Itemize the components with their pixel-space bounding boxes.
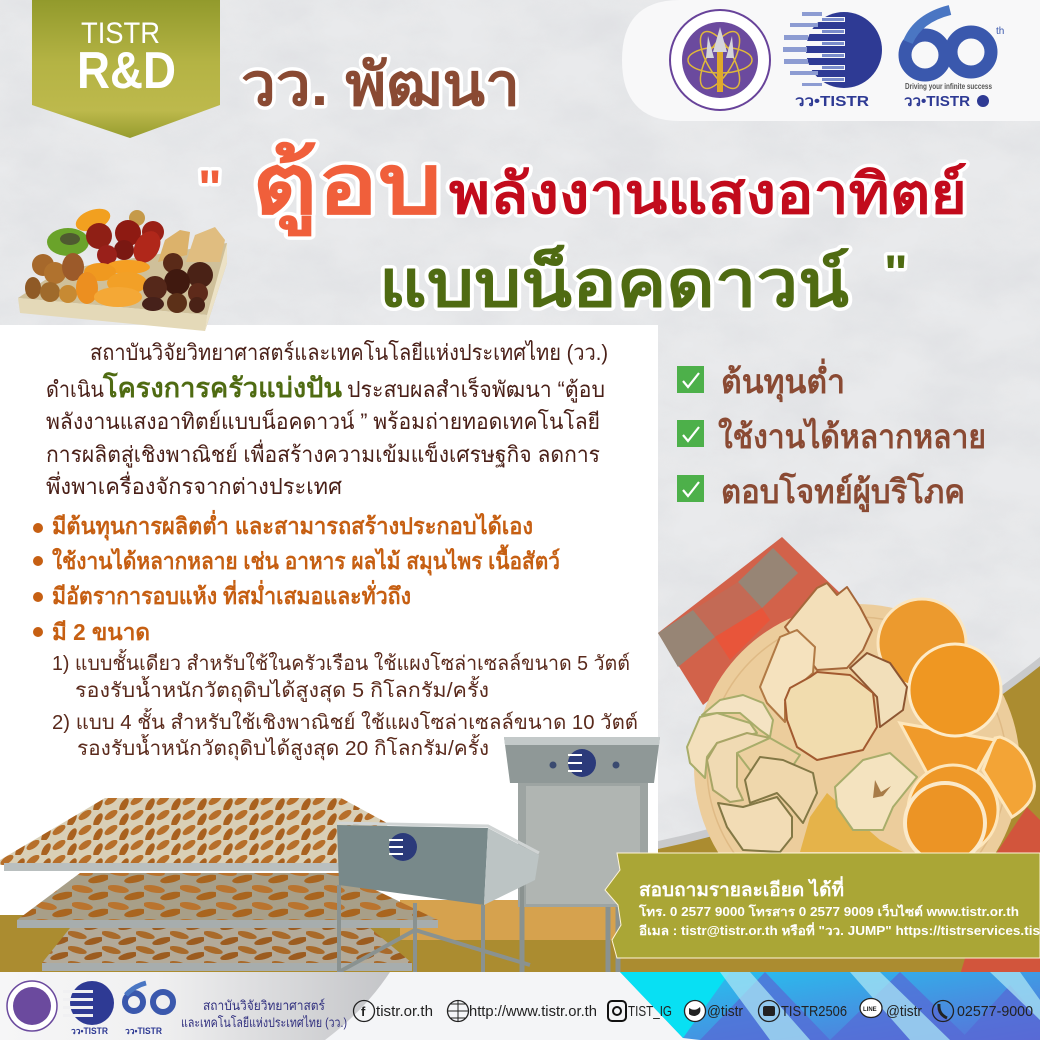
checklist: ต้นทุนต่ำ bbox=[721, 358, 845, 403]
bullet list: มีต้นทุนการผลิตต่ำ และสามารถสร้างประกอบได้เอง bbox=[52, 509, 533, 541]
title: " bbox=[884, 245, 908, 301]
text block: intro: ดำเนิน bbox=[46, 377, 104, 402]
ribbon: TISTR R&D: R&D bbox=[77, 42, 176, 100]
tan floor strip bbox=[400, 900, 630, 940]
footer bbox=[0, 972, 1040, 1040]
ribbon: TISTR R&D: TISTR bbox=[81, 17, 160, 50]
footer logos: วว•TISTR bbox=[71, 1026, 108, 1036]
text block: intro: การผลิตสู่เชิงพาณิชย์ เพื่อสร้างความเข้มแข็งเศรษฐกิจ ลดการ bbox=[46, 439, 600, 468]
size details: รองรับน้ำหนักวัตถุดิบได้สูงสุด 5 กิโลกรัม/ครั้ง bbox=[75, 676, 489, 703]
title: วว. พัฒนา bbox=[241, 52, 520, 118]
checklist: ตอบโจทย์ผู้บริโภค bbox=[721, 472, 965, 513]
logo: TISTR sphere: วว•TISTR bbox=[795, 93, 869, 110]
checklist bbox=[677, 358, 986, 513]
image: dryer cabinet bbox=[504, 737, 660, 972]
footer social links: f bbox=[361, 1004, 366, 1019]
text block: intro: โครงการครัวแบ่งปัน bbox=[102, 371, 343, 403]
bullet list: ใช้งานได้หลากหลาย เช่น อาหาร ผลไม้ สมุนไพร เนื้อสัตว์ bbox=[52, 544, 560, 576]
title bbox=[198, 52, 967, 320]
apple slices bbox=[785, 583, 872, 670]
text block: intro: พลังงานแสงอาทิตย์แบบน็อคดาวน์ ” พร้อมถ่ายทอดเทคโนโลยี bbox=[46, 407, 600, 434]
checklist: ใช้งานได้หลากหลาย bbox=[718, 417, 986, 455]
logo: 60th anniversary: th bbox=[996, 26, 1004, 37]
logo: 60th anniversary bbox=[904, 10, 1004, 110]
footer social links: @tistr bbox=[886, 1003, 922, 1020]
image: drying racks bbox=[0, 798, 438, 971]
image: small dryer bbox=[337, 823, 539, 972]
logo: 60th anniversary: Driving your infinite success bbox=[905, 81, 992, 91]
footer organisation name bbox=[181, 998, 347, 1030]
logo: 60th anniversary: วว•TISTR bbox=[904, 93, 970, 110]
image: dried fruit tray bbox=[18, 204, 227, 331]
footer social links: LINE bbox=[863, 1007, 877, 1013]
panel: description background bbox=[0, 325, 658, 915]
image: dried fruit plate bbox=[658, 537, 1040, 975]
footer logos bbox=[7, 981, 173, 1036]
gold lower band bbox=[0, 657, 1040, 975]
logo: TISTR sphere bbox=[783, 12, 882, 110]
footer social links: http://www.tistr.or.th bbox=[469, 1003, 597, 1020]
logo panel bbox=[622, 0, 1040, 121]
ribbon: TISTR R&D bbox=[32, 0, 220, 138]
contact box: โทร. 0 2577 9000 โทรสาร 0 2577 9009 เว็บไซต์ www.tistr.or.th bbox=[638, 904, 1019, 919]
bullet list bbox=[33, 509, 560, 645]
title: พลังงานแสงอาทิตย์ bbox=[449, 162, 967, 225]
bullet list: มี 2 ขนาด bbox=[52, 619, 150, 645]
footer logos: วว•TISTR bbox=[125, 1026, 162, 1036]
plate bbox=[694, 604, 1020, 930]
text block: intro: ประสบผลสำเร็จพัฒนา “ตู้อบ bbox=[347, 375, 605, 403]
footer social links bbox=[354, 998, 1033, 1022]
footer social links: @tistr bbox=[707, 1003, 743, 1020]
footer social links: 02577-9000 bbox=[957, 1003, 1033, 1020]
contact box bbox=[605, 853, 1040, 958]
orange slices bbox=[878, 599, 966, 687]
size details: 2) แบบ 4 ชั้น สำหรับใช้เชิงพาณิชย์ ใช้แผงโซล่าเซลล์ขนาด 10 วัตต์ bbox=[52, 708, 638, 734]
size details: รองรับน้ำหนักวัตถุดิบได้สูงสุด 20 กิโลกรัม/ครั้ง bbox=[77, 734, 489, 761]
text block: intro bbox=[46, 340, 608, 499]
title: " bbox=[198, 160, 222, 216]
footer organisation name: สถาบันวิจัยวิทยาศาสตร์ bbox=[203, 998, 325, 1013]
text block: intro: พึ่งพาเครื่องจักรจากต่างประเทศ bbox=[46, 471, 342, 499]
footer social links: TIST_IG bbox=[628, 1003, 672, 1020]
text block: intro: สถาบันวิจัยวิทยาศาสตร์และเทคโนโลยีแห่งประเทศไทย (วว.) bbox=[90, 340, 608, 365]
contact box: สอบถามรายละเอียด ได้ที่ bbox=[639, 876, 844, 901]
footer organisation name: และเทคโนโลยีแห่งประเทศไทย (วว.) bbox=[181, 1015, 347, 1030]
title: ตู้อบ bbox=[252, 137, 442, 237]
footer decoration: blue triangles bbox=[620, 972, 1040, 1040]
size details bbox=[52, 649, 638, 761]
cloth bbox=[658, 537, 840, 705]
logo: ministry seal bbox=[670, 10, 770, 110]
bullet list: มีอัตราการอบแห้ง ที่สม่ำเสมอและทั่วถึง bbox=[52, 579, 411, 609]
title: แบบน็อคดาวน์ bbox=[379, 245, 850, 320]
size details: 1) แบบชั้นเดียว สำหรับใช้ในครัวเรือน ใช้แผงโซล่าเซลล์ขนาด 5 วัตต์ bbox=[52, 649, 630, 675]
footer social links: TISTR2506 bbox=[781, 1003, 847, 1020]
footer social links: tistr.or.th bbox=[376, 1003, 433, 1020]
contact box: อีเมล : tistr@tistr.or.th หรือที่ "วว. JUMP" https://tistrservices.tis bbox=[638, 922, 1040, 938]
